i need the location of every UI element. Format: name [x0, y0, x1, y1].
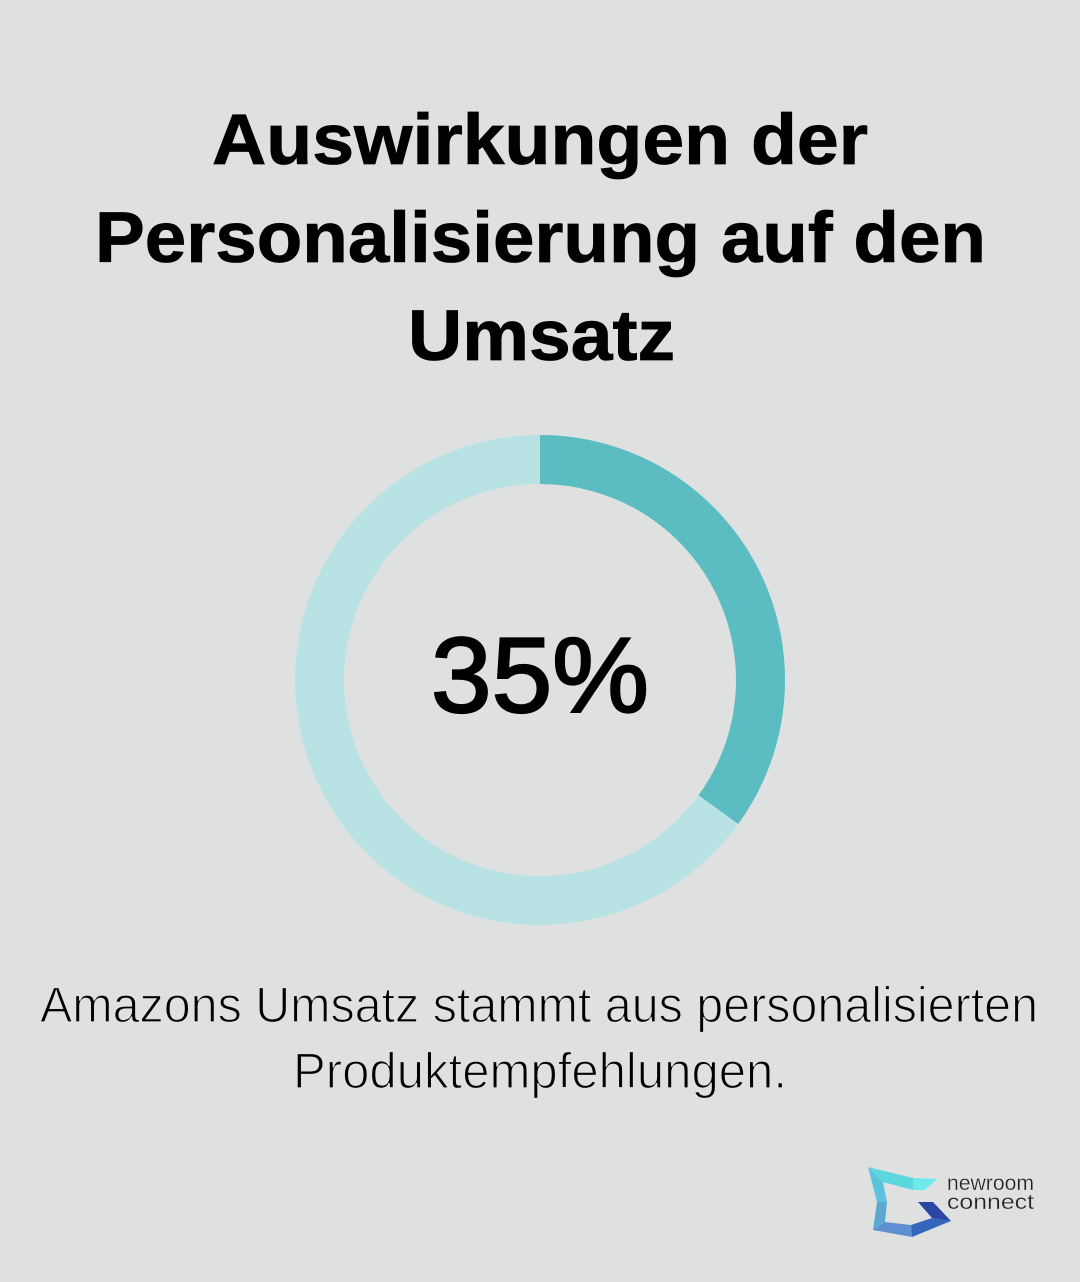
description text: Amazons Umsatz stammt aus personalisierten — [40, 977, 1038, 1033]
logo wordmark: connect — [947, 1190, 1034, 1214]
logo icon — [868, 1167, 951, 1237]
title — [95, 101, 986, 376]
donut chart: 35% — [320, 460, 761, 900]
title: Umsatz — [408, 297, 675, 376]
title: Personalisierung auf den — [95, 199, 986, 278]
logo wordmark — [947, 1171, 1034, 1214]
description text — [40, 977, 1038, 1099]
ring value segment — [540, 460, 761, 810]
title: Auswirkungen der — [212, 101, 868, 180]
description text: Produktempfehlungen. — [293, 1043, 787, 1099]
logo wordmark: newroom — [947, 1171, 1034, 1195]
center value: 35% — [431, 615, 649, 735]
ring track — [320, 460, 760, 900]
logo: newroom connect — [868, 1167, 1034, 1237]
